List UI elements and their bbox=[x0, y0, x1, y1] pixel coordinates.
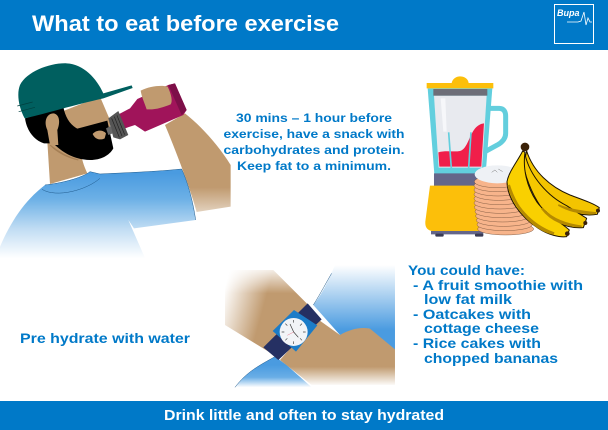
text: you could have bbox=[408, 262, 583, 366]
oatcakes bbox=[474, 176, 534, 235]
watch face bbox=[280, 318, 308, 346]
text: you could have: You could have: bbox=[408, 262, 525, 278]
illustration: wrist with watch bbox=[223, 265, 395, 387]
text: you could have: - A fruit smoothie with bbox=[413, 277, 583, 293]
banana stem bbox=[521, 143, 529, 151]
text: snack advice: exercise, have a snack with bbox=[224, 127, 404, 141]
watch case bbox=[273, 310, 317, 352]
illustration: man drinking from bottle bbox=[0, 63, 231, 263]
text: you could have: - Oatcakes with bbox=[413, 306, 531, 322]
hair and beard bbox=[25, 107, 113, 160]
watch strap bbox=[263, 303, 322, 360]
cap bbox=[18, 63, 133, 118]
footer text: Drink little and often to stay hydrated bbox=[164, 408, 444, 424]
footer bar bbox=[0, 401, 608, 430]
smoothie bbox=[438, 123, 484, 167]
text: you could have: chopped bananas bbox=[424, 350, 558, 366]
hand bbox=[141, 86, 172, 109]
text: you could have: - Rice cakes with bbox=[413, 335, 541, 351]
shirt bbox=[0, 169, 196, 263]
bottle bbox=[117, 83, 187, 132]
text: pre hydrate: Pre hydrate with water bbox=[20, 330, 191, 346]
hand bbox=[280, 318, 395, 385]
text: snack advice: Keep fat to a minimum. bbox=[237, 159, 391, 173]
text: snack advice bbox=[224, 111, 404, 173]
shirt sleeve lower bbox=[235, 357, 312, 387]
arm bbox=[165, 113, 231, 212]
bananas bbox=[507, 151, 599, 237]
blender handle bbox=[485, 108, 506, 152]
mouth bbox=[93, 131, 106, 139]
title: What to eat before exercise bbox=[32, 11, 339, 36]
ear bbox=[46, 113, 59, 145]
face bbox=[57, 97, 111, 150]
text: snack advice: 30 mins – 1 hour before bbox=[236, 111, 392, 125]
bottle cap bbox=[108, 111, 128, 139]
illustration: blender, oatcakes and bananas bbox=[425, 76, 600, 237]
header bar bbox=[0, 0, 608, 50]
text: you could have: low fat milk bbox=[424, 291, 512, 307]
blender lid bbox=[427, 76, 493, 88]
shirt sleeve upper bbox=[313, 265, 395, 350]
logo: Bupa: Bupa bbox=[557, 8, 580, 18]
blender base bbox=[434, 173, 485, 187]
blender jug bbox=[428, 88, 492, 174]
text: snack advice: carbohydrates and protein. bbox=[224, 143, 404, 157]
text: you could have: cottage cheese bbox=[424, 320, 539, 336]
neck bbox=[47, 142, 87, 184]
logo: Bupa bbox=[554, 4, 594, 44]
forearm bbox=[225, 270, 310, 357]
